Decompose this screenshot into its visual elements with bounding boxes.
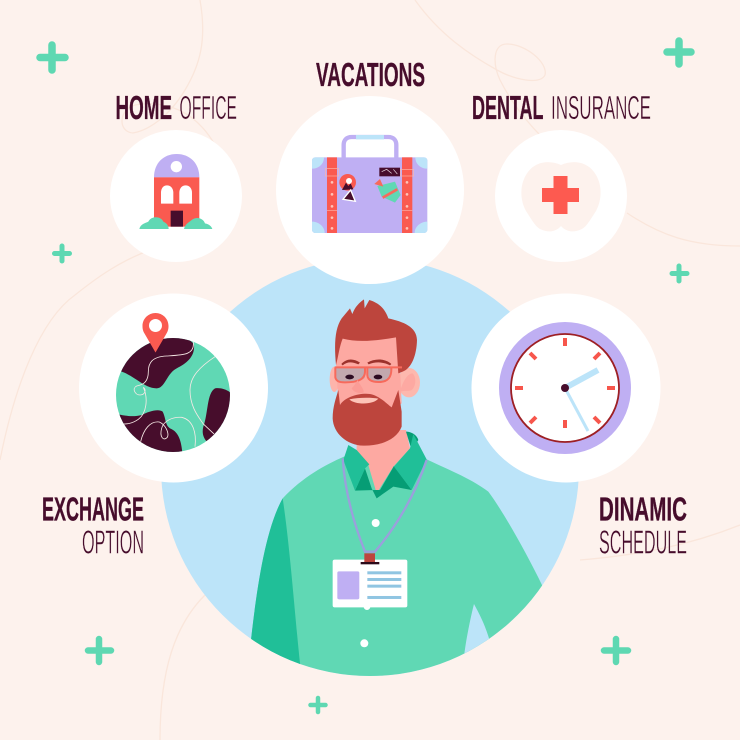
panel: exchange option: [79, 294, 268, 482]
icon: clock: [499, 322, 631, 454]
title: dinamic schedule: [599, 490, 687, 560]
title: exchange option: EXCHANGE: [42, 490, 144, 528]
circle: vacations: [276, 96, 464, 284]
panel: vacations: [276, 96, 464, 284]
text: OPTION: [82, 524, 144, 560]
circle: dinamic schedule: [472, 294, 660, 482]
title: home office: HOME: [116, 89, 172, 126]
circle: home office: [110, 130, 242, 262]
icon: globe with pin: [116, 313, 233, 457]
icon: house: [139, 154, 212, 229]
shirt and lanyard: [240, 430, 550, 683]
panel: dinamic schedule: [472, 294, 660, 482]
plus icons: [40, 41, 691, 712]
title: exchange option: [42, 490, 144, 560]
panel: home office: [110, 130, 242, 262]
central blue circle: [161, 258, 579, 676]
icon: tooth with cross: [521, 162, 601, 231]
head: [330, 299, 420, 446]
circle: dental insurance: [495, 130, 627, 262]
title: dental insurance: DENTAL: [472, 89, 544, 126]
title: vacations: VACATIONS: [316, 56, 425, 93]
text: OFFICE: [180, 89, 237, 126]
icon: suitcase: [312, 135, 427, 233]
panel: dental insurance: [495, 130, 627, 262]
title: dental insurance: INSURANCE: [551, 89, 651, 126]
title: dinamic schedule: DINAMIC: [599, 490, 687, 528]
person illustration: [240, 299, 550, 683]
circle: exchange option: [79, 294, 268, 482]
